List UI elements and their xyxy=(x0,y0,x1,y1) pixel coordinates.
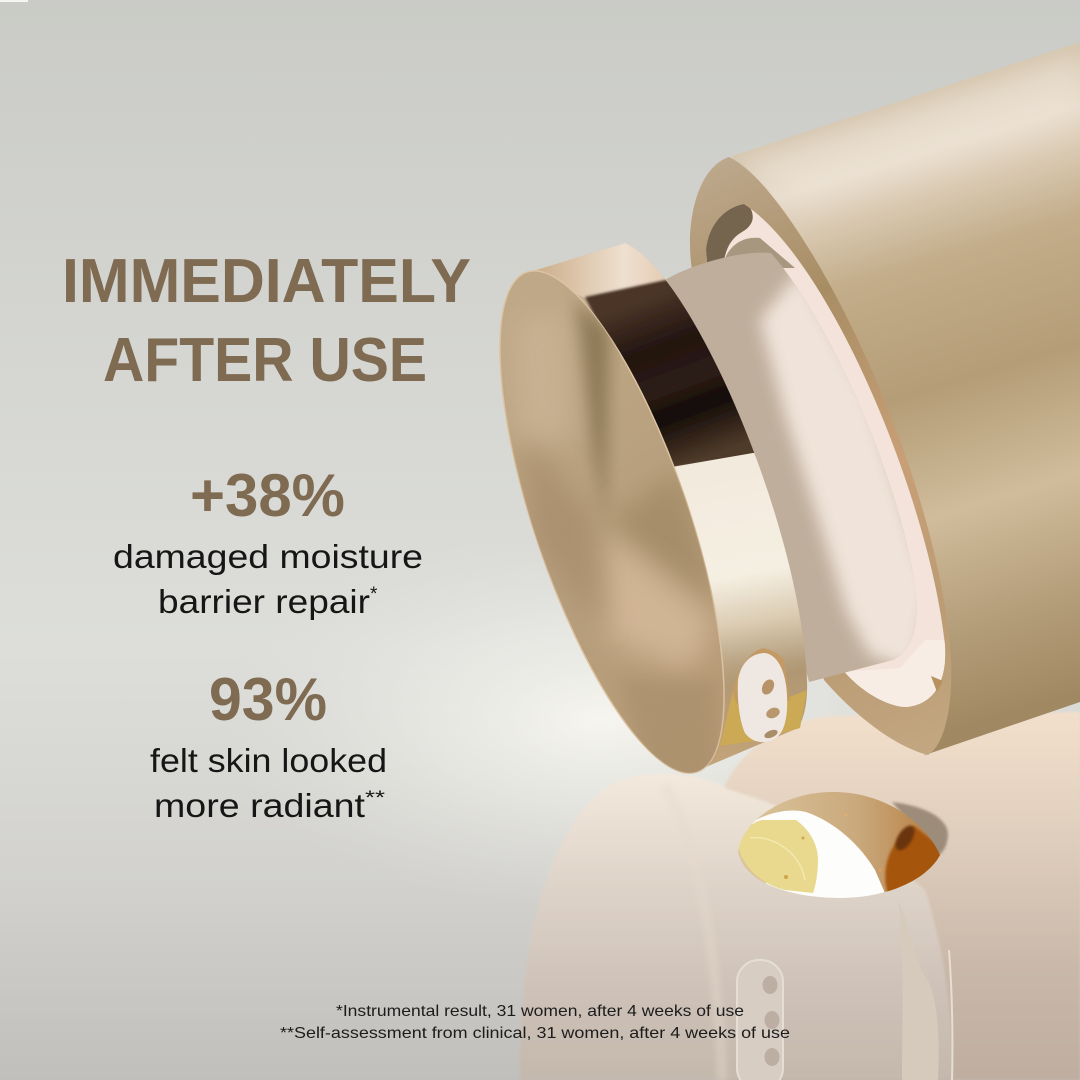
stat: radiant skin: felt skin looked xyxy=(150,742,387,779)
nozzle slot xyxy=(720,648,807,746)
stat: moisture barrier: barrier repair xyxy=(158,583,370,620)
footnotes: *Instrumental result, 31 women, after 4 weeks of use xyxy=(336,1003,744,1020)
stat: moisture barrier xyxy=(113,462,423,620)
stat: moisture barrier: * xyxy=(370,584,378,605)
product: tube rim and inner opening xyxy=(690,157,951,755)
reflected nozzle xyxy=(737,960,783,1080)
product: tube body xyxy=(732,42,1080,755)
stat: radiant skin: more radiant xyxy=(154,787,365,824)
floor reflection xyxy=(520,712,1080,1080)
product: cap face xyxy=(499,270,725,774)
stat: radiant skin: ** xyxy=(365,788,386,809)
footnotes xyxy=(280,1003,790,1042)
product: inner cream cylinder xyxy=(665,253,930,682)
title: AFTER USE xyxy=(103,326,427,395)
stat: radiant skin xyxy=(150,666,387,824)
serum droplet xyxy=(738,792,948,900)
title: IMMEDIATELY xyxy=(62,247,471,316)
stat: moisture barrier: +38% xyxy=(190,462,345,529)
title xyxy=(62,247,471,395)
stat: radiant skin: 93% xyxy=(209,666,327,733)
footnotes: **Self-assessment from clinical, 31 women, after 4 weeks of use xyxy=(280,1025,790,1042)
stat: moisture barrier: damaged moisture xyxy=(113,538,423,575)
product: cap band xyxy=(536,243,808,767)
